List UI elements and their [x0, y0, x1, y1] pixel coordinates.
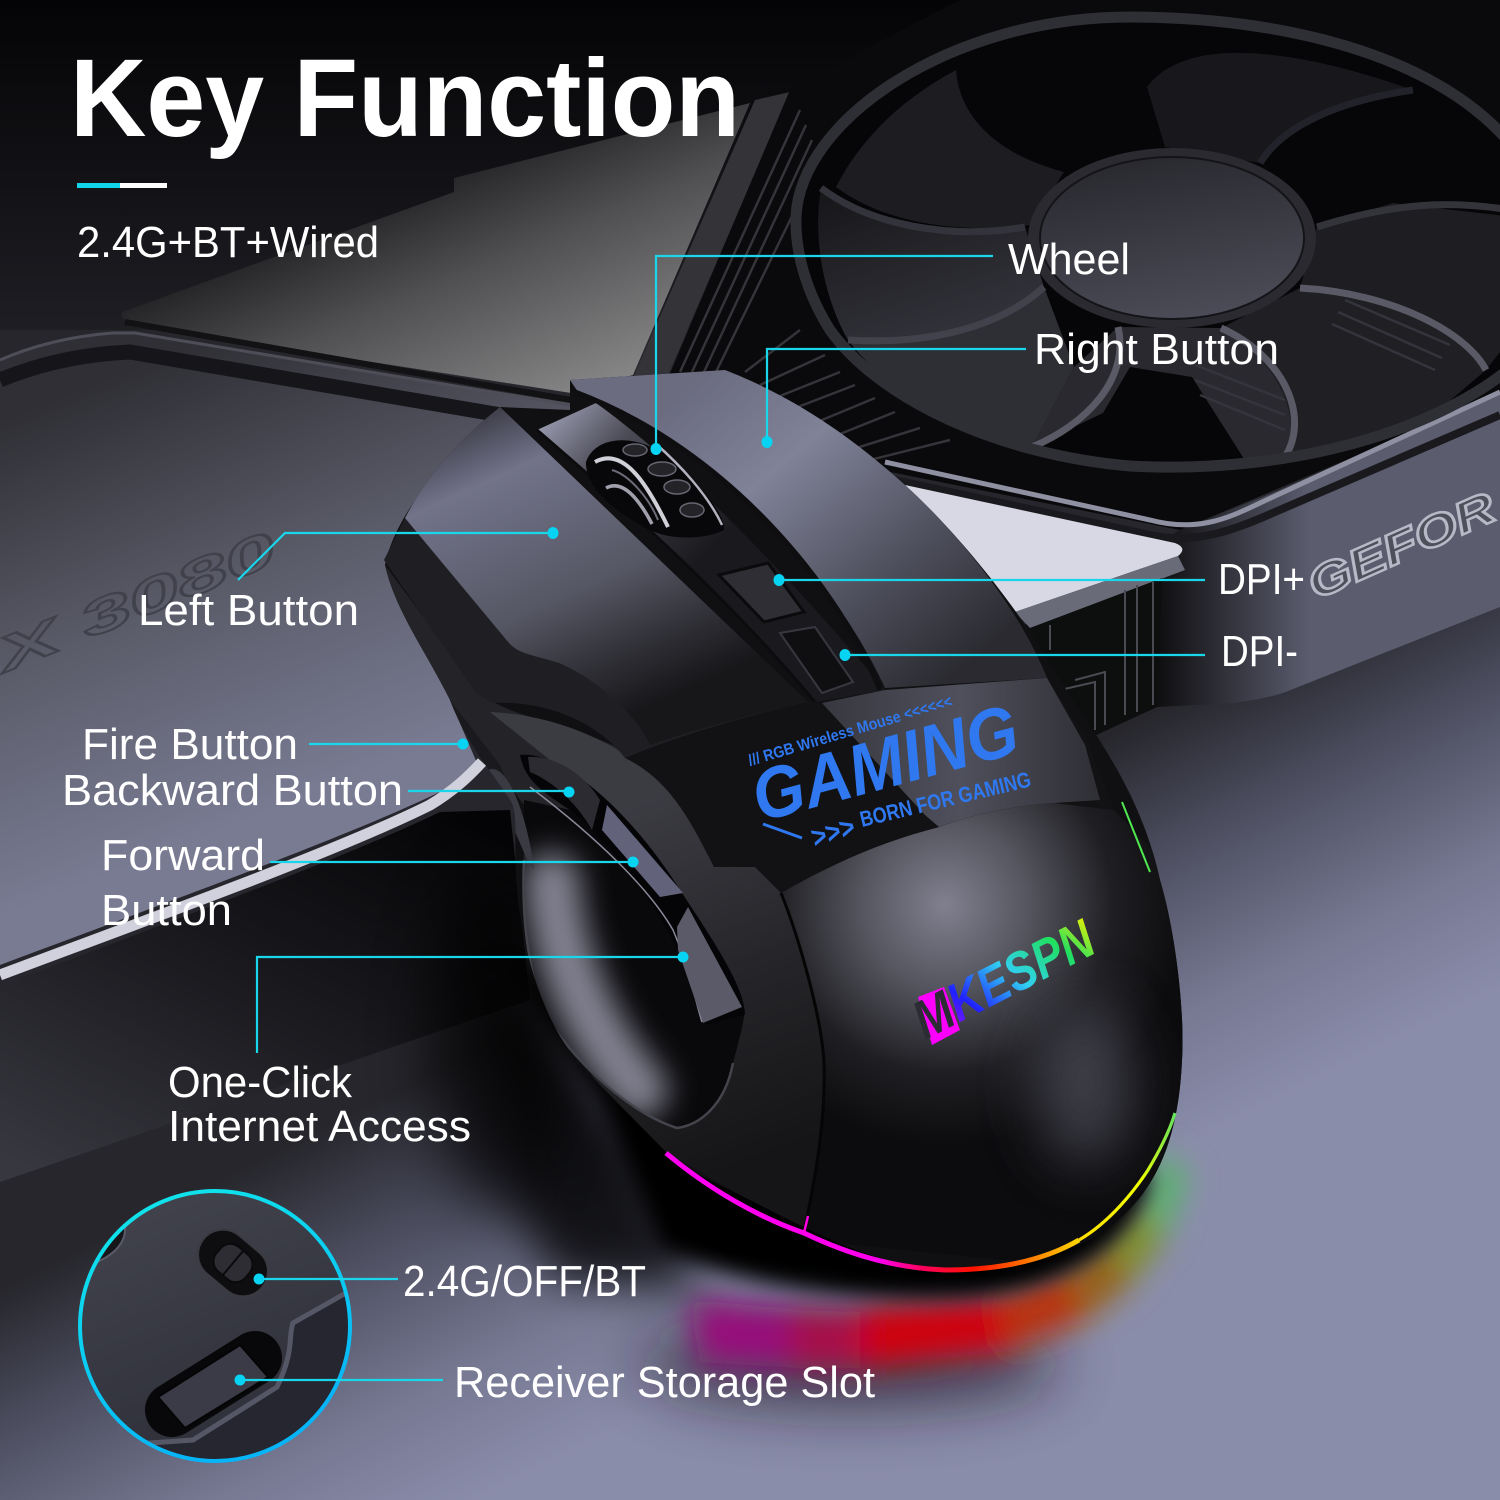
card side face with brand	[1000, 392, 1500, 735]
callout: wheel: Wheel	[1008, 235, 1130, 284]
callout: left button: Left Button	[138, 586, 359, 635]
mouse	[384, 370, 1200, 1280]
gaming panel gloss	[822, 678, 1100, 827]
callout: backward button: Backward Button	[62, 766, 403, 815]
card fins upper left	[680, 110, 950, 460]
callout: mode switch	[254, 1257, 646, 1306]
panel dark side	[0, 810, 530, 1182]
gaming lettering: >>>	[807, 810, 859, 855]
palm lower sheen	[1040, 1005, 1130, 1165]
callout: backward button	[62, 766, 574, 815]
panel top face	[0, 333, 576, 965]
subtitle: 2.4G+BT+Wired	[77, 218, 379, 267]
receiver slot	[158, 1345, 268, 1428]
scoop base	[523, 800, 744, 1128]
graphics card with fan	[633, 0, 1500, 738]
callout: one-click internet access: Internet Access	[168, 1102, 471, 1151]
background top area	[0, 0, 1500, 360]
callout: right button: Right Button	[1034, 325, 1279, 374]
callout: DPI minus: DPI-	[1221, 627, 1298, 676]
title: Key Function	[70, 37, 740, 160]
callout: forward button: Forward	[101, 831, 265, 880]
callout: mode switch: 2.4G/OFF/BT	[403, 1257, 646, 1306]
palm shell	[796, 803, 1182, 1202]
white panel edge	[0, 762, 482, 975]
right button edge	[575, 392, 880, 690]
floor surface	[0, 330, 1500, 1500]
backward button	[528, 757, 600, 830]
gaming lettering: /// RGB Wireless Mouse <<<<<<	[746, 693, 954, 770]
fan blades	[836, 70, 1064, 228]
blade rims	[821, 90, 1500, 457]
fan	[796, 17, 1500, 467]
side indicator	[1122, 802, 1150, 872]
inset: mouse underside	[78, 1189, 352, 1463]
callout: wheel	[650, 235, 1130, 455]
fire button	[450, 702, 504, 776]
RGB strip	[666, 1113, 1175, 1270]
callout: DPI minus	[840, 627, 1298, 676]
callout: left button	[138, 527, 558, 635]
heat sink behind blades	[1195, 300, 1450, 430]
palm seam glow	[804, 1216, 808, 1233]
corner notch	[98, 1228, 126, 1262]
callout: right button	[762, 325, 1279, 448]
channel edge	[537, 430, 815, 702]
background plate	[121, 103, 750, 400]
inset ring	[80, 1191, 350, 1461]
scoop highlight	[552, 880, 640, 1090]
fan ring	[796, 17, 1500, 467]
callout: receiver storage slot	[234, 1358, 875, 1407]
left button lit surface	[405, 407, 808, 745]
DPI minus button	[780, 627, 853, 693]
side fin	[488, 769, 534, 870]
brand logo: MKESPN	[903, 908, 1105, 1051]
callout: forward button	[101, 831, 638, 935]
DPI plus button	[719, 563, 804, 622]
callout: fire button: Fire Button	[82, 720, 298, 769]
seam line	[781, 893, 824, 1232]
mode switch	[188, 1219, 278, 1307]
plate lower edge	[125, 322, 571, 400]
callout: receiver storage slot: Receiver Storage Slot	[454, 1358, 875, 1407]
forward button	[602, 805, 683, 897]
callout: one-click internet access	[168, 952, 688, 1151]
scoop rim	[523, 860, 733, 1128]
scroll wheel	[586, 440, 724, 538]
gaming panel base	[625, 678, 1114, 893]
mouse left shadow	[430, 870, 550, 1210]
underside recessed plate	[148, 1292, 348, 1459]
center channel	[537, 403, 885, 702]
fan hub	[1028, 148, 1316, 328]
rainbow glow under mouse	[500, 950, 1190, 1407]
callout: fire button	[82, 720, 468, 769]
gaming lettering: BORN FOR GAMING	[857, 767, 1033, 832]
silver edge highlight	[885, 392, 1500, 525]
heat sink fins	[1030, 578, 1162, 738]
callout: one-click internet access: One-Click	[168, 1058, 353, 1107]
lower left band	[386, 566, 618, 810]
card rail	[633, 92, 790, 378]
gaming lettering: GAMING	[743, 690, 1027, 837]
accent bar	[77, 183, 167, 188]
right button	[570, 370, 1047, 688]
recess highlight	[530, 787, 702, 1022]
left button base	[384, 407, 808, 758]
internet access button	[677, 907, 742, 1023]
side grip band	[490, 712, 822, 1156]
card top face	[668, 0, 1500, 530]
GEFORCE lettering: GEFOR	[1300, 483, 1500, 609]
side button recess	[520, 755, 745, 1025]
white plate below card	[905, 485, 1182, 612]
callout: DPI plus: DPI+	[1218, 555, 1305, 604]
mouse body	[385, 370, 1183, 1269]
callout: DPI plus	[774, 555, 1305, 604]
white plate edge	[1015, 556, 1185, 628]
callout: forward button: Button	[101, 886, 232, 935]
left graphics card panel	[0, 333, 576, 1182]
panel bevel	[0, 352, 560, 425]
